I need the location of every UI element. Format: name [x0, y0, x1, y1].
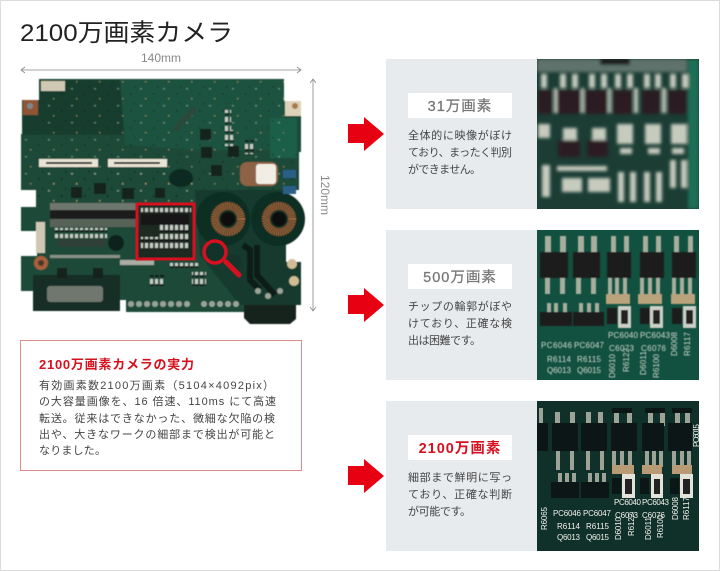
photo: sharp 2100万画素 view: R6122	[627, 512, 636, 536]
photo: 500万画素 view: C6076	[641, 344, 667, 353]
photo: sharp 2100万画素 view: PC6015	[692, 423, 701, 447]
photo: sharp 2100万画素 view: C6073	[615, 511, 639, 520]
photo: sharp 2100万画素 view: R6065	[540, 506, 549, 530]
circuit board photo	[21, 79, 305, 324]
width dimension: 140mm	[21, 51, 301, 73]
photo: sharp 2100万画素 view: D6011	[644, 516, 653, 540]
photo: 500万画素 view: PC6047	[574, 341, 605, 350]
magnifier icon	[204, 241, 239, 275]
callout: camera capability: 有効画素数2100万画素（5104×4092pix）	[39, 378, 274, 392]
photo: sharp 2100万画素 view: C6076	[642, 511, 666, 520]
photo: 500万画素 view: R6117	[683, 331, 692, 356]
photo: sharp 2100万画素 view: R6114	[557, 522, 581, 531]
photo: 500万画素 view: Q6015	[577, 366, 602, 375]
photo: 500万画素 view: PC6040	[608, 331, 639, 340]
photo: sharp 2100万画素 view: D6008	[671, 496, 680, 520]
panel: 2100万画素: 細部まで鮮明に写っ	[408, 470, 512, 484]
callout: camera capability: 転送。従来はできなかった、微細な欠陥の検	[39, 411, 275, 425]
photo: sharp 2100万画素 view: R6117	[682, 496, 691, 520]
photo: sharp 2100万画素 view	[537, 401, 701, 551]
photo: 500万画素 view: R6122	[622, 347, 631, 372]
photo: blurred 31万画素 view	[537, 59, 699, 209]
photo: 500万画素 view: R6114	[547, 355, 572, 364]
callout: camera capability: の大容量画像を、16 倍速、110ms にて高速	[39, 394, 276, 408]
photo: sharp 2100万画素 view: D6010	[614, 516, 623, 540]
height dimension: 120mm	[310, 79, 332, 311]
photo: 500万画素 view	[537, 230, 699, 380]
photo: 500万画素 view: D6011	[639, 350, 648, 375]
photo: sharp 2100万画素 view: PC6047	[583, 509, 612, 518]
photo: sharp 2100万画素 view: PC6040	[614, 498, 642, 507]
photo: 500万画素 view: C6073	[609, 344, 635, 353]
callout: camera capability: 出や、大きなワークの細部まで検出が可能と	[39, 427, 275, 441]
photo: sharp 2100万画素 view: R6100	[656, 514, 665, 538]
photo: sharp 2100万画素 view: R6115	[586, 522, 610, 531]
panel: 31万画素: 31万画素	[428, 98, 492, 115]
photo: 500万画素 view: PC6046	[541, 341, 573, 350]
callout: camera capability: なりました。	[39, 444, 106, 457]
red highlight box	[137, 204, 194, 259]
panel: 31万画素: ができません。	[408, 162, 481, 176]
width dimension: 140mm: 140mm	[141, 51, 181, 65]
photo: sharp 2100万画素 view: PC6046	[553, 509, 582, 518]
photo: 500万画素 view: Q6013	[547, 366, 572, 375]
panel: 500万画素	[386, 230, 537, 380]
photo: 500万画素 view: R6115	[577, 355, 602, 364]
panel: 31万画素: 全体的に映像がぼけ	[408, 128, 512, 142]
photo: sharp 2100万画素 view: Q6015	[586, 533, 610, 542]
arrow 3	[348, 459, 384, 493]
panel: 2100万画素: 2100万画素	[419, 440, 501, 457]
photo: 500万画素 view: R6100	[652, 353, 661, 378]
callout: camera capability: 2100万画素カメラの実力	[39, 357, 194, 372]
photo: sharp 2100万画素 view: Q6013	[557, 533, 581, 542]
panel: 500万画素: チップの輪郭がぼや	[408, 299, 512, 313]
title: 2100万画素カメラ	[20, 19, 233, 47]
arrow 2	[348, 288, 384, 322]
photo: 500万画素 view: PC6043	[640, 331, 671, 340]
panel: 31万画素	[386, 59, 537, 209]
panel: 500万画素: けており、正確な検	[408, 316, 512, 330]
panel: 500万画素: 出は困難です。	[408, 333, 481, 347]
panel: 500万画素: 500万画素	[423, 269, 497, 286]
photo: 500万画素 view: D6010	[608, 353, 617, 378]
panel: 2100万画素: ており、正確な判断	[408, 488, 512, 501]
photo: 500万画素 view: D6008	[670, 331, 679, 356]
callout: camera capability	[20, 340, 302, 470]
panel: 31万画素: ており、まったく判別	[408, 146, 512, 159]
photo: sharp 2100万画素 view: PC6043	[642, 498, 670, 507]
panel: 2100万画素	[386, 401, 537, 551]
height dimension: 120mm: 120mm	[318, 175, 332, 215]
panel: 2100万画素: が可能です。	[408, 504, 471, 518]
arrow 1	[348, 117, 384, 151]
